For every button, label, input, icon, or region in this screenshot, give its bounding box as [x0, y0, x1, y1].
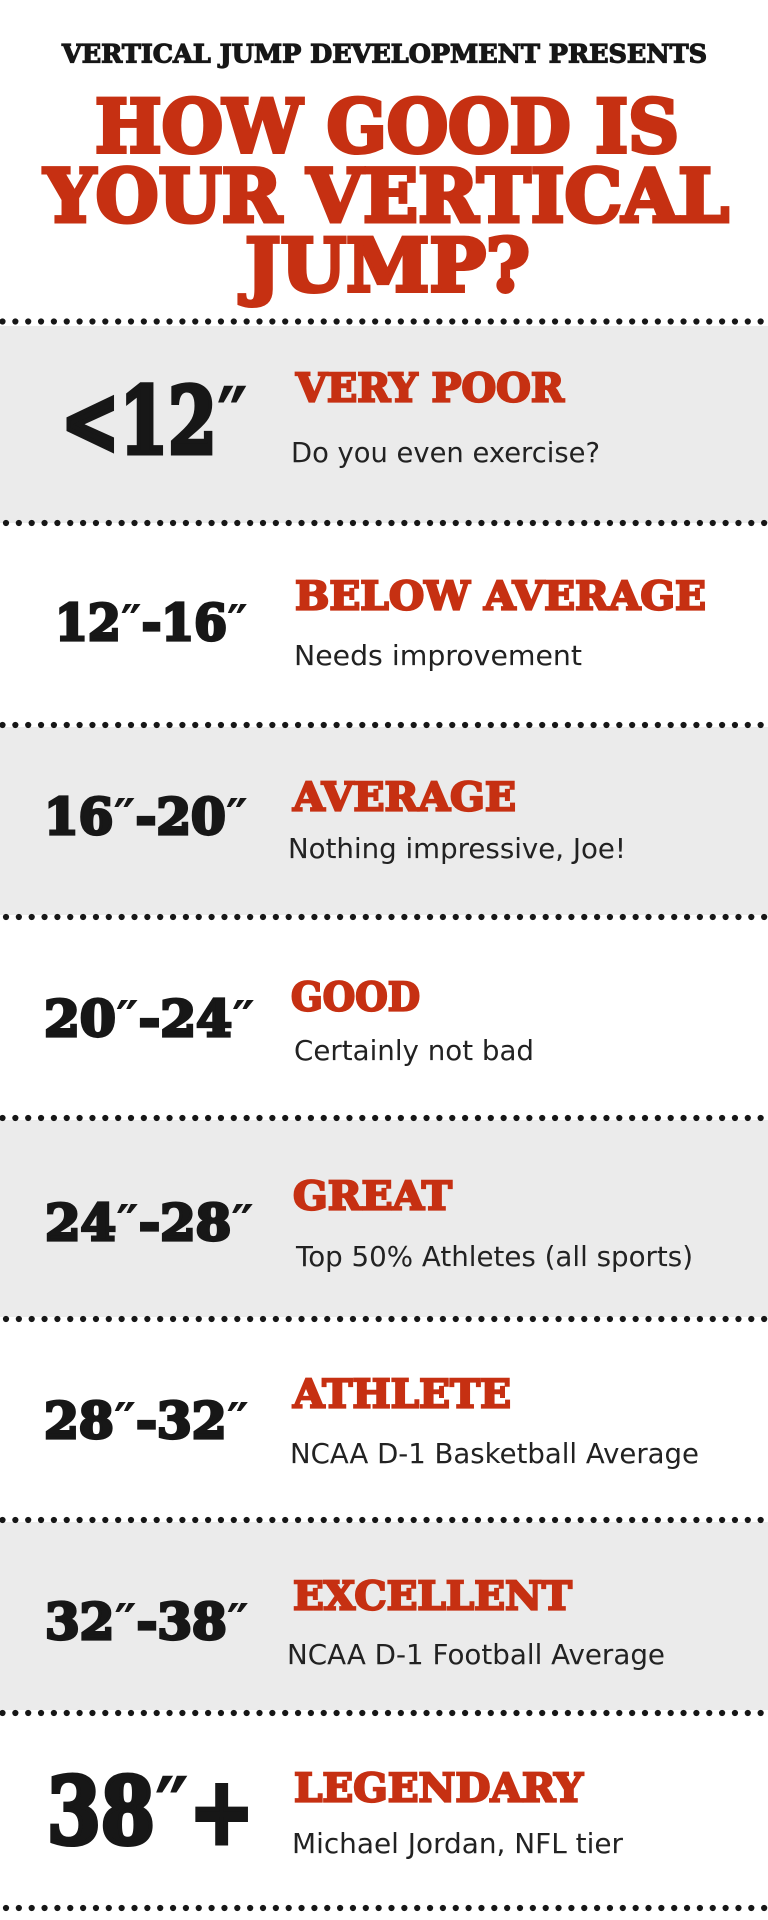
title [43, 84, 729, 309]
range: 16 to 20 inches: 16″-20″ [44, 787, 248, 846]
range: 38 inches plus: 38″+ [47, 1757, 254, 1865]
range: under 12 inches: <12″ [61, 367, 248, 475]
description: Nothing impressive, Joe! [288, 832, 626, 865]
label: good: GOOD [291, 974, 420, 1020]
panel: good [0, 919, 768, 1116]
panel: legendary [0, 1715, 768, 1905]
label: excellent: EXCELLENT [293, 1574, 572, 1620]
range: 20 to 24 inches: 20″-24″ [44, 989, 255, 1048]
title: JUMP? [239, 223, 530, 309]
description: NCAA D-1 Basketball Average [290, 1437, 699, 1470]
description: Needs improvement [294, 639, 582, 672]
range: 24 to 28 inches: 24″-28″ [45, 1193, 254, 1252]
label: athlete: ATHLETE [292, 1372, 511, 1418]
range: 32 to 38 inches: 32″-38″ [45, 1592, 249, 1651]
panel: athlete [0, 1321, 768, 1518]
label: legendary: LEGENDARY [294, 1766, 584, 1812]
label: below average: BELOW AVERAGE [295, 574, 706, 620]
range: 12 to 16 inches: 12″-16″ [55, 593, 248, 652]
presenter heading: VERTICAL JUMP DEVELOPMENT PRESENTS [61, 40, 707, 68]
panel: very poor [0, 326, 768, 523]
panel: average [0, 727, 768, 915]
panel: below average [0, 525, 768, 723]
title: YOUR VERTICAL [43, 154, 729, 240]
description: NCAA D-1 Football Average [287, 1638, 665, 1671]
label: average: AVERAGE [292, 774, 516, 820]
description: Certainly not bad [294, 1034, 534, 1067]
description: Do you even exercise? [291, 436, 600, 469]
label: great: GREAT [293, 1174, 452, 1220]
description: Michael Jordan, NFL tier [292, 1827, 623, 1860]
range: 28 to 32 inches: 28″-32″ [44, 1391, 249, 1450]
description: Top 50% Athletes (all sports) [295, 1240, 693, 1273]
panel: great [0, 1120, 768, 1317]
label: very poor: VERY POOR [295, 366, 565, 412]
title: HOW GOOD IS [95, 84, 679, 170]
panel: excellent [0, 1522, 768, 1710]
